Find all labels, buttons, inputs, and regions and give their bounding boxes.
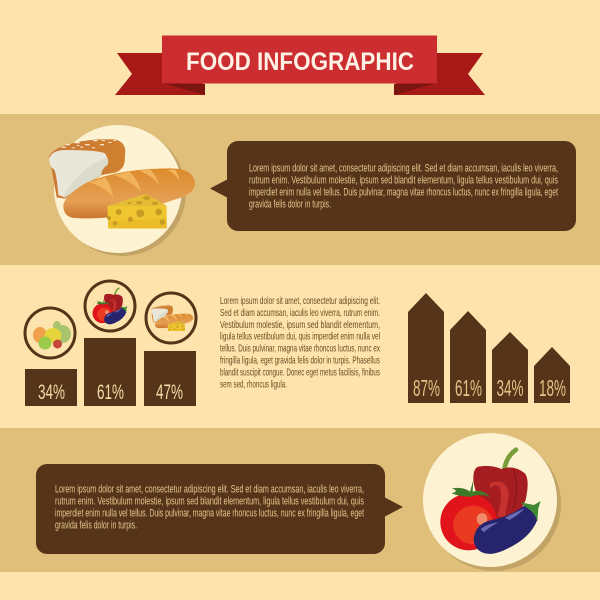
- middle text block: blandit suscipit congue. Donec eget metus facilisis, finibus: [220, 366, 380, 378]
- icon: vegetables: [85, 281, 135, 331]
- middle text block: sem sed, rhoncus ligula.: [220, 378, 287, 390]
- icon: fruit: [25, 308, 75, 358]
- middle text block: Sed et diam accumsan, iaculis leo viverra, rutrum enim.: [220, 307, 380, 319]
- middle text block: tellus. Duis pulvinar, magna vitae rhoncus luctus, nunc ex: [220, 342, 380, 354]
- band: bottom section: [0, 428, 600, 572]
- middle text block: [220, 295, 380, 390]
- bar: vegetables 61%: [84, 338, 136, 406]
- icon: bread and cheese circle: [49, 125, 195, 256]
- icon: bread: [146, 293, 196, 343]
- arrow bar: 61%: 61%: [455, 375, 482, 401]
- title ribbon: [115, 36, 485, 95]
- bottom callout text: imperdiet enim nulla vel tellus. Duis pulvinar, magna vitae rhoncus luctus, nunc ex fringilla ligula, eget: [55, 508, 364, 520]
- arrow bar: 18%: [534, 347, 570, 403]
- middle text block: ligula tellus vestibulum dui, quis imperdiet enim nulla vel: [220, 330, 380, 342]
- callout: bottom speech bubble: [36, 464, 403, 554]
- arrow bar: 34%: 34%: [496, 375, 524, 401]
- arrow bar: 61%: [450, 311, 486, 403]
- middle text block: Lorem ipsum dolor sit amet, consectetur adipiscing elit.: [220, 295, 380, 307]
- arrow chart: [408, 293, 570, 403]
- middle text block: fringilla ligula, eget gravida felis dolor in turpis. Phasellus: [220, 354, 380, 366]
- icon: vegetables circle: [423, 433, 561, 571]
- bottom callout text: Lorem ipsum dolor sit amet, consectetur adipiscing elit. Sed et diam accumsan, iaculis leo viverra,: [55, 484, 364, 496]
- bar: vegetables 61%: 61%: [97, 381, 124, 404]
- top callout text: [249, 162, 558, 210]
- bottom callout text: gravida felis dolor in turpis.: [55, 520, 137, 532]
- arrow bar: 87%: 87%: [413, 375, 440, 401]
- arrow bar: 18%: 18%: [539, 375, 566, 401]
- bottom callout text: rutrum enim. Vestibulum molestie, ipsum sed blandit elementum, ligula tellus vestibulum dui, quis: [55, 496, 364, 508]
- bar: bread 47%: [144, 351, 196, 406]
- title: FOOD INFOGRAPHIC: [186, 48, 414, 76]
- callout: top speech bubble: [210, 141, 576, 231]
- band: top section: [0, 114, 600, 265]
- bar: bread 47%: 47%: [156, 381, 183, 404]
- arrow bar: 87%: [408, 293, 444, 403]
- top callout text: gravida felis dolor in turpis.: [249, 198, 331, 210]
- bottom callout text: [55, 484, 364, 532]
- bar: fruit 34%: [25, 369, 77, 406]
- middle text block: Vestibulum molestie, ipsum sed blandit elementum,: [220, 319, 380, 331]
- bar chart: food groups: [25, 281, 196, 406]
- arrow bar: 34%: [492, 332, 528, 403]
- bar: fruit 34%: 34%: [38, 381, 65, 404]
